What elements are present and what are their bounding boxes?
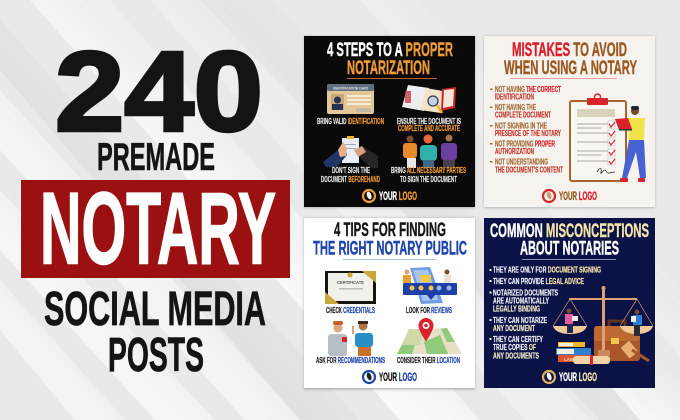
list of misconceptions [490, 266, 601, 360]
text: ensure the document is complete and accurate: COMPLETE AND ACCURATE [398, 124, 460, 133]
text: bring all necessary parties: BRING ALL NECESSARY PARTIES [391, 166, 466, 175]
list of misconceptions: ANY DOCUMENT [493, 324, 535, 333]
heading: 240 premade notary social media posts [21, 28, 290, 382]
list of mistakes: NOT HAVING THE CORRECT [495, 85, 561, 94]
gavel [621, 341, 649, 361]
icon: document with magnifying glass [402, 85, 456, 113]
text: don't sign the document beforehand: DOCUMENT BEFOREHAND [321, 175, 380, 184]
illustration: scales of justice with briefcase, books and gavel [553, 286, 653, 365]
text: bring all necessary parties [391, 166, 466, 184]
icon: certificate [325, 271, 376, 304]
panel heading: MISTAKES TO AVOID [512, 40, 627, 61]
text: bring valid identification: BRING VALID IDENTIFICATION [317, 117, 384, 126]
text: ensure the document is complete and accurate: ENSURE THE DOCUMENT IS [397, 117, 461, 126]
logo: YOUR LOGO [559, 191, 597, 203]
figure on right pan [631, 310, 642, 336]
list of mistakes: IDENTIFICATION [495, 92, 534, 102]
text: ask for recommendations: ASK FOR RECOMMENDATIONS [316, 356, 385, 365]
panel: mistakes to avoid when using a notary [484, 36, 655, 208]
list of misconceptions: NOTARIZED DOCUMENTS [493, 288, 558, 298]
list of misconceptions: THEY CAN NOTARIZE [493, 316, 547, 325]
panel heading: NOTARIZATION [347, 58, 430, 79]
panel: 4 steps to a proper notarization [304, 36, 475, 208]
list of misconceptions: THEY CAN CERTIFY [493, 335, 543, 344]
figure on left pan [565, 308, 578, 333]
list of mistakes: COMPLETE DOCUMENT [495, 110, 551, 120]
text: look for reviews: LOOK FOR REVIEWS [406, 306, 452, 315]
list of misconceptions: ARE AUTOMATICALLY [493, 296, 549, 306]
text: premade: PREMADE [97, 136, 215, 179]
list of misconceptions: TRUE COPIES OF [493, 343, 536, 352]
panel heading: THE RIGHT NOTARY PUBLIC [313, 238, 467, 260]
logo: YOUR LOGO [379, 372, 417, 384]
headline number 240: 240 [55, 28, 263, 154]
list of mistakes: NOT HAVING THE [495, 103, 536, 112]
icon: clipboard with checklist [570, 94, 626, 181]
list of mistakes: NOT PROVIDING PROPER [495, 140, 555, 148]
scales [553, 286, 653, 356]
panel heading: 4 STEPS TO A PROPER [327, 40, 453, 61]
text: posts: POSTS [108, 329, 204, 382]
icon: two people talking [328, 321, 373, 356]
logo [543, 190, 597, 203]
logo: YOUR LOGO [559, 372, 597, 384]
text: social media: SOCIAL MEDIA [44, 283, 266, 336]
panel heading [504, 40, 637, 79]
icon: identification card [327, 84, 374, 114]
icon: three people [403, 134, 457, 168]
panel: 4 tips for finding the right notary public [304, 218, 475, 390]
panel heading: 4 TIPS FOR FINDING [334, 220, 446, 241]
panel: common misconceptions about notaries [484, 218, 655, 388]
list of mistakes: THE DOCUMENT'S CONTENT [495, 166, 563, 174]
list of misconceptions: THEY ARE ONLY FOR DOCUMENT SIGNING [493, 266, 601, 274]
icon: person with laptop [615, 106, 646, 182]
text: don't sign the document beforehand [321, 166, 380, 184]
list of misconceptions: LEGALLY BINDING [493, 304, 540, 314]
panel heading [490, 221, 649, 260]
text: check credentials: CHECK CREDENTIALS [326, 306, 375, 315]
text: ensure the document is complete and accurate [397, 117, 461, 133]
text: bring all necessary parties: TO SIGN THE DOCUMENT [400, 175, 457, 184]
list of mistakes: NOT UNDERSTANDING [495, 158, 548, 166]
list of mistakes: PRESENCE OF THE NOTARY [495, 129, 561, 138]
panel heading [327, 40, 453, 79]
icon: map with location pin [397, 318, 462, 354]
logo: YOUR LOGO [379, 191, 417, 203]
panel heading [313, 220, 467, 260]
logo [363, 190, 417, 203]
scroll [573, 355, 610, 365]
list of mistakes [490, 85, 563, 174]
icon: hands signing document [323, 136, 378, 168]
briefcase [594, 321, 640, 361]
list of misconceptions: ANY DOCUMENTS [493, 352, 539, 360]
text: consider their location: CONSIDER THEIR LOCATION [397, 356, 460, 365]
stack of books: LAW [564, 357, 575, 362]
red banner: notary: NOTARY [40, 172, 276, 286]
red banner: notary [21, 172, 290, 286]
text: don't sign the document beforehand: DON'T SIGN THE [332, 166, 370, 175]
list of mistakes: NOT SIGNING IN THE [495, 122, 547, 130]
list of mistakes: AUTHORIZATION [495, 147, 534, 156]
list of misconceptions: THEY CAN PROVIDE LEGAL ADVICE [493, 277, 584, 286]
logo [363, 371, 417, 384]
icon: phone with star reviews [403, 267, 457, 304]
icon: identification card: IDENTIFICATION CARD [333, 86, 368, 90]
icon: certificate: CERTIFICATE [337, 280, 364, 285]
logo [543, 371, 597, 384]
